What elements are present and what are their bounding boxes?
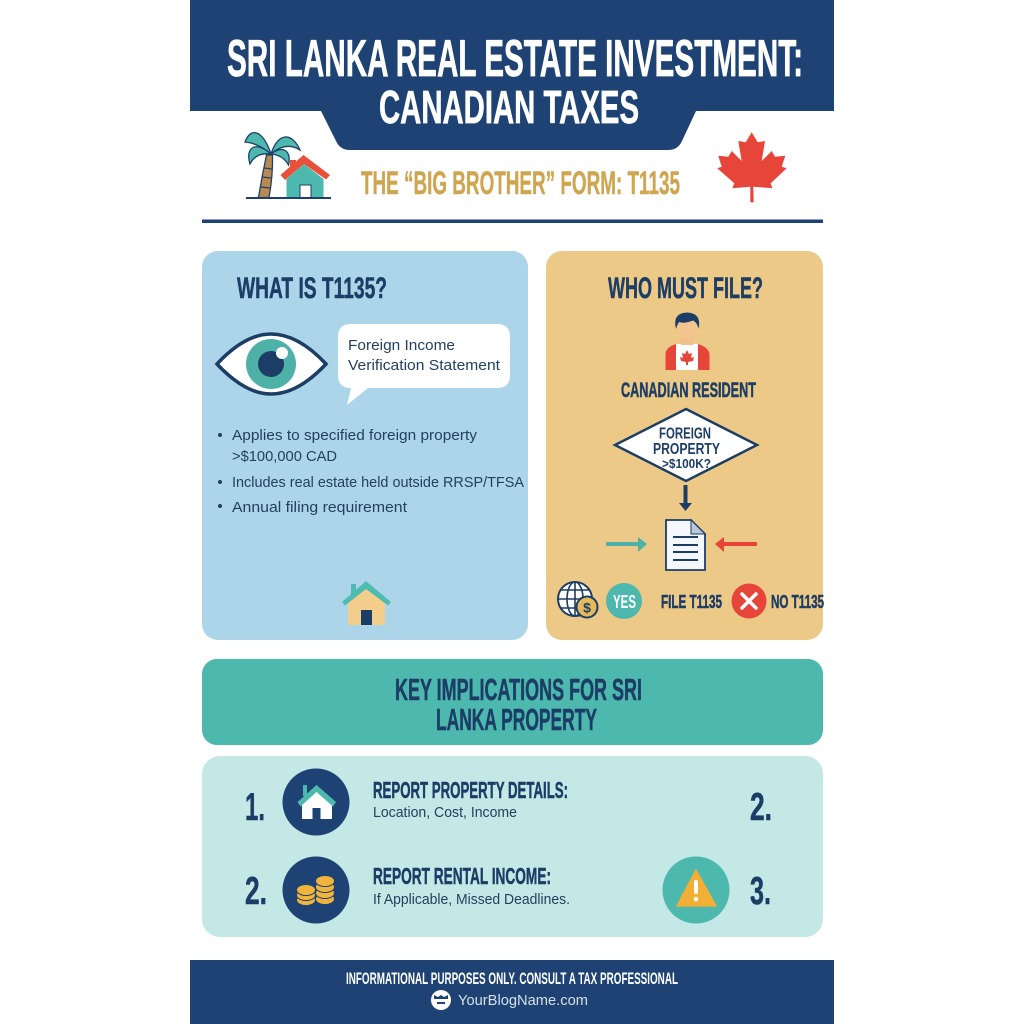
badge: yes [606, 583, 642, 619]
heading: what is T1135: WHAT IS T1135? [237, 272, 387, 305]
item: report property details: REPORT PROPERTY DETAILS: [373, 777, 568, 803]
panel: implications list [202, 756, 823, 937]
speech bubble [338, 324, 510, 405]
arrow: teal [606, 537, 647, 552]
icon: warning [662, 856, 730, 924]
decision diamond: PROPERTY [653, 441, 721, 458]
item: report rental income [373, 863, 570, 908]
label: no T1135: NO T1135 [771, 592, 824, 612]
subtitle: THE “BIG BROTHER” FORM: T1135 [361, 165, 680, 201]
icon: Canadian resident [666, 312, 710, 370]
speech bubble: Foreign Income [348, 337, 455, 354]
banner: key implications [202, 659, 823, 745]
decision diamond: FOREIGN [659, 426, 711, 442]
item: report rental income: REPORT RENTAL INCOME: [373, 863, 551, 889]
number 3: 3. [750, 870, 771, 913]
banner: key implications: KEY IMPLICATIONS FOR SRI [395, 672, 642, 707]
icon: small house [342, 581, 391, 625]
badge: no [732, 584, 766, 618]
icon: palm tree and house [245, 133, 331, 199]
disclaimer: INFORMATIONAL PURPOSES ONLY. CONSULT A TAX PROFESSIONAL [346, 969, 678, 988]
icon: eye [217, 334, 326, 394]
number 1: 1. [245, 786, 265, 829]
icon: document [666, 520, 705, 570]
label: file T1135: FILE T1135 [661, 592, 722, 612]
banner: key implications: LANKA PROPERTY [436, 702, 597, 737]
heading: who must file: WHO MUST FILE? [608, 272, 763, 305]
arrow: red [715, 537, 757, 552]
panel: what is T1135 [202, 251, 528, 640]
item: report property details [373, 777, 568, 821]
item: report property details: Location, Cost, Income [373, 805, 517, 821]
footer [190, 960, 834, 1024]
bullet list: Applies to specified foreign property [232, 427, 477, 444]
website: YourBlogName.com [458, 992, 588, 1009]
icon: maple leaf [717, 132, 787, 202]
panel: who must file [546, 251, 824, 640]
icon: globe with coin [558, 582, 598, 618]
bullet list: Annual filing requirement [232, 499, 408, 516]
decision diamond: >$100K? [662, 456, 711, 471]
badge: yes: YES [613, 592, 636, 612]
arrow: down [679, 485, 692, 511]
label: Canadian resident: CANADIAN RESIDENT [621, 379, 756, 402]
bullet list: Includes real estate held outside RRSP/TFSA [232, 474, 524, 491]
icon: logo [431, 990, 451, 1010]
item: report rental income: If Applicable, Missed Deadlines. [373, 892, 570, 908]
icon: globe with coin: $ [583, 600, 591, 616]
header banner [190, 0, 834, 150]
speech bubble: Verification Statement [348, 357, 501, 374]
title: CANADIAN TAXES [379, 81, 639, 133]
number 2 left: 2. [245, 870, 267, 913]
number 2 right: 2. [750, 786, 772, 829]
icon: house in circle [282, 768, 350, 836]
icon: coins in circle [282, 856, 350, 924]
decision diamond [615, 409, 757, 481]
bullet list: >$100,000 CAD [232, 448, 337, 465]
bullet list [218, 427, 524, 516]
title [227, 30, 803, 133]
